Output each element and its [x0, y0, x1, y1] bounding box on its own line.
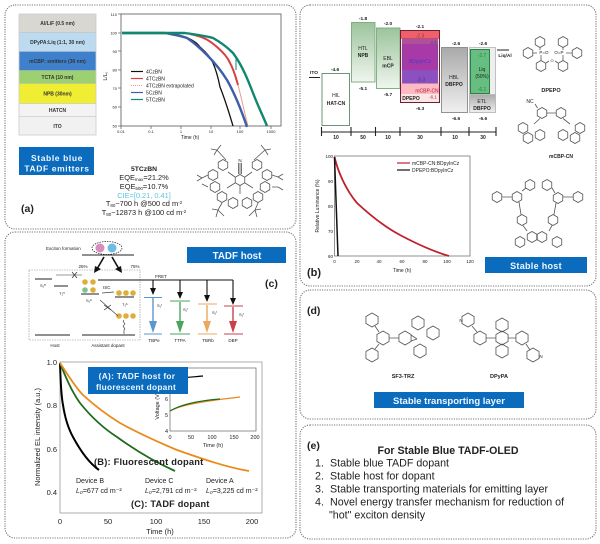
EL decay chart: L₀=3,225 cd m⁻² — [206, 488, 258, 495]
EL decay chart: 150 — [198, 517, 210, 526]
energy transfer diagram: S₁ᴬ — [86, 298, 92, 303]
panel label (a): (a) — [21, 203, 34, 215]
energy level diagram: -5.1 — [359, 86, 367, 92]
summary list: "hot" exciton density — [329, 510, 426, 522]
energy level diagram: 10 — [333, 135, 339, 141]
energy level diagram: -5.7 — [384, 92, 392, 98]
energy level diagram: -2.6 — [452, 41, 460, 47]
luminance decay chart — [315, 154, 474, 274]
luminance decay chart: DPEPO:BDpyInCz — [412, 168, 454, 174]
inset voltage chart: 6 — [165, 397, 168, 403]
5TCzBN performance text: -2 — [182, 209, 187, 214]
summary list: Stable transporting materials for emitting layer — [330, 484, 548, 496]
energy transfer diagram: 75% — [130, 264, 140, 269]
5TCzBN performance text: 80 — [106, 212, 112, 217]
panel: (e) stable blue TADF-OLED summary — [300, 425, 596, 539]
panel: (c) TADF host — [5, 232, 296, 538]
energy level diagram: -2.7 — [478, 53, 487, 59]
inset voltage chart: 5 — [165, 413, 168, 419]
lifetime chart: 100 — [237, 129, 244, 134]
5TCzBN performance text: =21.2% — [143, 173, 169, 182]
summary list: Stable host for dopant — [330, 470, 435, 482]
energy level diagram: HAT-CN — [327, 101, 346, 107]
molecule: DPEPO: P=O — [539, 50, 549, 55]
energy transfer diagram: DBP — [228, 338, 238, 343]
energy transfer diagram: ISC — [103, 285, 111, 290]
energy level diagram: HIL — [332, 93, 340, 99]
energy level diagram: -2.6 — [479, 41, 487, 47]
energy transfer diagram: TTPA — [174, 338, 186, 343]
panel label (c): (c) — [265, 278, 278, 290]
label: stable blue TADF emitters — [19, 147, 94, 175]
energy level diagram: BDpyInCz — [409, 59, 432, 65]
inset voltage chart: Voltage (V) — [155, 392, 161, 420]
energy level diagram: 50 — [360, 135, 366, 141]
energy transfer diagram: Assistant dopant — [91, 343, 125, 348]
device layer stack: ITO — [53, 124, 62, 130]
energy transfer diagram: S₁ᶠ — [157, 303, 162, 308]
EL decay chart: Device B — [76, 478, 104, 485]
lifetime chart: 0.01 — [117, 129, 126, 134]
energy level diagram: NPB — [358, 53, 369, 59]
luminance decay chart: 100 — [325, 154, 333, 159]
energy level diagram: 10 — [452, 135, 458, 141]
panel: (a) stable blue TADF emitters — [5, 5, 296, 229]
energy transfer diagram: Exciton formation — [46, 246, 81, 251]
device layer stack — [19, 14, 96, 135]
label: (C) TADF dopant: (C): TADF dopant — [131, 499, 210, 509]
panel label (b): (b) — [307, 267, 321, 279]
energy level diagram: 10 — [385, 135, 391, 141]
5TCzBN performance text: ~700 h @500 cd m — [115, 199, 178, 208]
EL decay chart: 200 — [246, 517, 258, 526]
energy level diagram: -4.6 — [331, 67, 339, 73]
summary list: 4. — [315, 496, 324, 508]
5TCzBN performance text: T — [106, 199, 110, 208]
inset voltage chart: 0 — [168, 435, 172, 441]
energy level diagram: mCBP-CN — [415, 88, 439, 94]
luminance decay chart: 0 — [333, 259, 336, 264]
device layer stack: HATCN — [49, 108, 66, 114]
inset voltage chart: 50 — [188, 435, 194, 441]
energy transfer diagram: FRET — [155, 274, 167, 279]
label: TADF host: TADF host — [213, 251, 262, 262]
5TCzBN performance text: max — [135, 177, 144, 182]
lifetime chart: 1000 — [267, 129, 276, 134]
energy transfer diagram: S₁ᶠ — [212, 310, 217, 315]
molecule: DPyPA: N — [539, 354, 543, 359]
5TCzBN performance text: -2 — [178, 200, 183, 205]
inset voltage chart: 4 — [165, 429, 168, 435]
energy level diagram — [309, 16, 512, 141]
lifetime chart: 70 — [113, 86, 118, 91]
lifetime chart: 4TCzBN extrapolated — [146, 84, 194, 90]
5TCzBN performance text: 5TCzBN — [131, 166, 157, 173]
panel: (b) stable host — [300, 5, 596, 286]
energy transfer diagram: S₁ᶠ — [183, 307, 188, 312]
5TCzBN performance text — [102, 166, 187, 217]
energy level diagram: HTL — [358, 46, 368, 52]
luminance decay chart: 120 — [466, 259, 474, 264]
molecule: DPyPA — [459, 313, 543, 362]
lifetime chart: 0.1 — [148, 129, 155, 134]
label: DPEPO: DPEPO — [541, 88, 561, 94]
summary list: Novel energy transfer mechanism for reduction of — [330, 496, 564, 508]
summary list — [315, 458, 564, 522]
EL decay chart: Normalized EL intensity (a.u.) — [33, 387, 42, 486]
energy level diagram: -1.8 — [359, 16, 367, 22]
inset voltage chart: 100 — [207, 435, 217, 441]
energy transfer diagram: TBPe — [148, 338, 160, 343]
luminance decay chart: 20 — [354, 259, 360, 264]
inset voltage chart: Time (h) — [203, 443, 223, 449]
panel: (d) stable transporting layer — [300, 290, 596, 419]
energy level diagram: DBFPO — [473, 106, 491, 112]
energy level diagram: -6.1 — [478, 87, 487, 93]
energy level diagram: -2.3 — [416, 34, 425, 40]
energy level diagram: -6.1 — [429, 94, 437, 100]
energy level diagram: -6.3 — [416, 106, 424, 112]
energy transfer diagram — [29, 242, 244, 348]
label: (A) TADF host for fluorescent dopant: fluorescent dopant — [96, 382, 176, 392]
energy level diagram: -2.0 — [384, 21, 392, 27]
panel label (e): (e) — [307, 440, 320, 452]
inset voltage chart: 150 — [229, 435, 239, 441]
device layer stack: DPyPA:Liq (1:1, 30 nm) — [30, 40, 85, 46]
EL decay chart: 50 — [104, 517, 112, 526]
lifetime chart: Time (h) — [181, 135, 200, 141]
energy level diagram: ETL — [477, 99, 487, 105]
EL decay chart: L₀=677 cd m⁻² — [76, 488, 122, 495]
energy level diagram: 30 — [480, 135, 486, 141]
device layer stack: TCTA (10 nm) — [42, 75, 74, 81]
label: SF3-TRZ: SF3-TRZ — [392, 374, 415, 380]
luminance decay chart: 40 — [376, 259, 382, 264]
inset voltage chart — [155, 368, 260, 449]
lifetime chart — [103, 12, 281, 141]
EL decay chart: Device C — [145, 478, 173, 485]
EL decay chart — [33, 358, 262, 536]
EL decay chart: Time (h) — [146, 527, 174, 536]
luminance decay chart: Time (h) — [393, 268, 412, 274]
lifetime chart: 60 — [113, 104, 118, 110]
lifetime chart: 80 — [113, 68, 118, 72]
molecule: DPEPO — [523, 36, 582, 72]
lifetime chart: 50 — [113, 124, 118, 128]
energy level diagram: -2.5 — [430, 40, 437, 44]
label: TADF host — [187, 247, 286, 263]
EL decay chart: 0.6 — [47, 445, 57, 454]
device layer stack: mCBP: emitters (30 nm) — [29, 59, 86, 65]
EL decay chart: 1.0 — [47, 358, 57, 367]
EL decay chart: 100 — [150, 517, 162, 526]
lifetime chart: 4CzBN — [146, 70, 162, 76]
energy level diagram: Liq — [479, 67, 486, 73]
5TCzBN performance text: 500 — [135, 186, 143, 191]
energy transfer diagram: TBRb — [202, 338, 214, 343]
energy level diagram: ITO — [310, 70, 318, 76]
label: stable host — [485, 257, 587, 273]
luminance decay chart: 100 — [443, 259, 451, 264]
energy transfer diagram: T₁ᴬ — [122, 302, 128, 307]
energy level diagram: Liq/Al — [498, 53, 512, 59]
panel label (d): (d) — [307, 305, 320, 317]
molecule: mCBP-CN — [518, 99, 585, 144]
summary list: Stable blue TADF dopant — [330, 458, 449, 470]
label: stable transporting layer — [374, 392, 524, 408]
5TCzBN performance text: CIE=[0.21, 0.41] — [117, 191, 171, 200]
lifetime chart: L/L₀ — [103, 71, 109, 81]
luminance decay chart: Relative Luminance (%) — [315, 179, 321, 233]
energy level diagram: DPEPO — [402, 96, 420, 102]
device layer stack: Al/LiF (0.5 nm) — [40, 21, 75, 27]
energy transfer diagram: Host — [50, 343, 60, 348]
device layer stack: NPB (30nm) — [43, 92, 72, 98]
molecule: 5TCzBN: N — [238, 158, 242, 163]
luminance decay chart: mCBP-CN:BDpyInCz — [412, 161, 460, 167]
energy transfer diagram: S₁ᴴ — [40, 283, 46, 288]
label: stable transporting layer: Stable transporting layer — [393, 396, 505, 407]
molecule: SF3-TRZ — [366, 313, 439, 362]
lifetime chart: 5CzBN — [146, 90, 162, 96]
label: DPyPA: DPyPA — [490, 374, 508, 380]
EL decay chart: L₀=2,791 cd m⁻² — [145, 488, 197, 495]
energy level diagram: (50%) — [475, 74, 489, 80]
energy level diagram: -2.1 — [416, 24, 424, 30]
label: mCBP-CN: mCBP-CN — [549, 154, 573, 160]
energy level diagram: mCP — [382, 64, 394, 70]
energy transfer diagram: T₁ᴴ — [59, 291, 65, 296]
summary list: 1. — [315, 458, 324, 470]
lifetime chart: 5TCzBN — [146, 98, 165, 104]
molecule: 5TCzBN — [197, 145, 283, 217]
5TCzBN performance text: ~12873 h @100 cd m — [111, 208, 182, 217]
luminance decay chart: 90 — [328, 179, 333, 184]
luminance decay chart: 60 — [328, 254, 333, 259]
label: stable blue TADF emitters: TADF emitters — [24, 164, 90, 174]
luminance decay chart: 80 — [422, 259, 428, 264]
luminance decay chart: 60 — [399, 259, 405, 264]
energy level diagram: DBFPO — [445, 82, 463, 88]
molecule: DPEPO: O=P — [554, 50, 564, 55]
energy level diagram: 30 — [417, 135, 423, 141]
summary list: 3. — [315, 484, 324, 496]
energy level diagram: EBL — [383, 56, 393, 62]
5TCzBN performance text: EQE — [120, 182, 135, 191]
lifetime chart: 90 — [113, 49, 118, 54]
lifetime chart: 10 — [209, 129, 214, 134]
5TCzBN performance text: T — [102, 208, 106, 217]
energy level diagram: HBL — [449, 75, 459, 81]
molecule: mCBP-CN: NC — [526, 99, 534, 105]
5TCzBN performance text: EQE — [119, 173, 135, 182]
energy level diagram: -6.6 — [479, 116, 487, 122]
lifetime chart: 1 — [180, 129, 183, 134]
lifetime chart: 4TCzBN — [146, 76, 165, 82]
EL decay chart: 0 — [58, 517, 62, 526]
molecule: DPEPO: O — [550, 58, 554, 63]
label: stable blue TADF emitters: Stable blue — [31, 153, 83, 163]
energy transfer diagram: S₁ᶠ — [239, 312, 244, 317]
inset voltage chart: 200 — [250, 435, 260, 441]
label: (A) TADF host for fluorescent dopant: (A): TADF host for — [99, 371, 176, 381]
EL decay chart: 0.8 — [47, 401, 57, 410]
label: (B) fluorescent dopant: (B): Fluorescent dopant — [94, 457, 203, 467]
molecule: stable host — [492, 180, 583, 248]
5TCzBN performance text: 80 — [110, 203, 116, 208]
energy level diagram: -5.3 — [417, 78, 426, 84]
label: (A) TADF host for fluorescent dopant — [88, 367, 188, 394]
luminance decay chart: 80 — [328, 204, 333, 209]
summary heading: For Stable Blue TADF-OLED — [377, 445, 519, 457]
molecule: DPyPA: N — [459, 318, 463, 323]
EL decay chart: 0.4 — [47, 488, 57, 497]
luminance decay chart: 70 — [328, 229, 333, 234]
lifetime chart: 110 — [111, 12, 118, 17]
label: stable host: Stable host — [510, 261, 562, 271]
energy level diagram: -6.6 — [452, 116, 460, 122]
EL decay chart: Device A — [206, 478, 234, 485]
energy transfer diagram: 25% — [78, 264, 88, 269]
5TCzBN performance text: =10.7% — [143, 182, 169, 191]
summary list: 2. — [315, 470, 324, 482]
lifetime chart: 100 — [110, 30, 118, 36]
